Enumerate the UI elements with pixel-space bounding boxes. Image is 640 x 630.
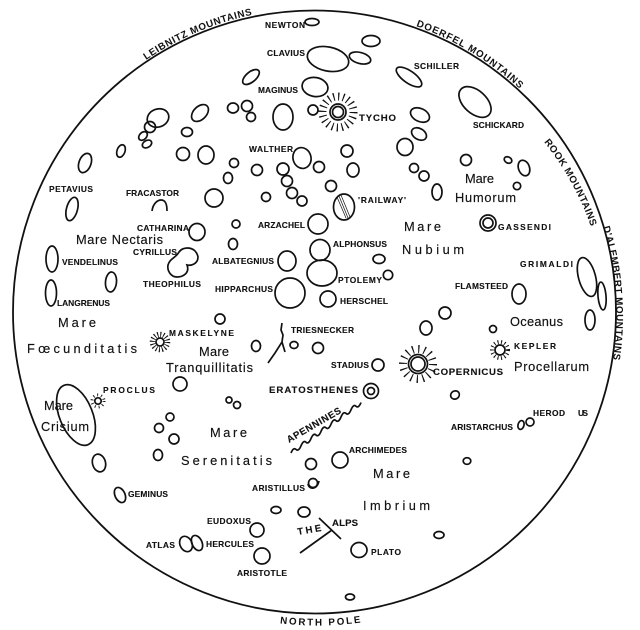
crater: Vendelinus: VENDELINUS: [62, 257, 118, 267]
crater: Herodotus: HEROD: [533, 408, 565, 418]
crater: Proclus: [92, 385, 155, 407]
crater: Gassendi: GASSENDI: [498, 222, 551, 232]
crater: Clavius: [267, 43, 351, 75]
crater: Aristotle: ARISTOTLE: [237, 568, 287, 578]
crater: Gassendi: [480, 215, 551, 232]
crater: Hercules: HERCULES: [206, 539, 254, 549]
crater: Eudoxus: [207, 516, 264, 537]
crater: Geminus: GEMINUS: [128, 489, 168, 499]
Mare Nubium: Mare: [404, 219, 441, 234]
crater: Fracastor: [126, 188, 179, 211]
crater: Albategnius: [212, 251, 296, 271]
crater: Schickard: SCHICKARD: [473, 120, 524, 130]
crater: Geminus: [112, 486, 168, 504]
crater: Catharina: CATHARINA: [137, 223, 189, 233]
crater: Cyrillus and Theophilus: CYRILLUS: [133, 247, 177, 257]
crater: Langrenus: [46, 280, 110, 308]
crater: Proclus: PROCLUS: [103, 385, 155, 395]
Mare Humorum: Humorum: [455, 190, 516, 205]
crater: Kepler: [492, 341, 556, 358]
crater: Atlas: [146, 534, 195, 554]
crater: Fracastor: FRACASTOR: [126, 188, 179, 198]
crater: Vendelinus: [46, 246, 118, 272]
crater: Flamsteed: FLAMSTEED: [455, 281, 508, 291]
label: Petavius: [49, 184, 93, 222]
crater: Stadius: [331, 359, 384, 371]
Mare Serenitatis: Mare: [210, 425, 247, 440]
Mare Foecunditatis: Fœcunditatis: [27, 341, 137, 356]
crater: Flamsteed: [455, 281, 526, 304]
crater: Ptolemy: [307, 260, 382, 286]
crater: Aristillus: ARISTILLUS: [252, 483, 305, 493]
crater: Catharina: [137, 223, 205, 240]
crater: Alphonsus: [310, 239, 387, 260]
Mare Serenitatis: Serenitatis: [181, 453, 272, 468]
crater: Herodotus: [526, 408, 588, 426]
crater: Albategnius: ALBATEGNIUS: [212, 256, 274, 266]
crater: Aristarchus: [451, 420, 525, 432]
Mare Nectaris: Mare Nectaris: [76, 232, 163, 247]
crater: Newton: [265, 18, 319, 30]
crater: Hipparchus: [215, 278, 305, 308]
crater: Railway: [334, 194, 406, 220]
crater: Grimaldi: [520, 255, 600, 299]
crater: Eratosthenes: ERATOSTHENES: [269, 385, 359, 396]
crater: Railway: 'RAILWAY': [358, 195, 406, 205]
Mare Tranquillitatis: [166, 344, 253, 375]
crater: Maskelyne: MASKELYNE: [169, 328, 234, 338]
crater: Alphonsus: ALPHONSUS: [333, 239, 387, 249]
crater: Grimaldi: GRIMALDI: [520, 259, 573, 269]
crater: Copernicus: COPERNICUS: [433, 367, 504, 378]
Mare Imbrium: [363, 466, 430, 513]
Mare Nubium: Nubium: [402, 242, 464, 257]
rille: Triesnecker: TRIESNECKER: [291, 325, 354, 335]
crater: Newton: NEWTON: [265, 20, 305, 30]
mountains: The Alps: ALPS: [332, 518, 359, 529]
crater: Langrenus: LANGRENUS: [57, 298, 110, 308]
mountains: The Alps: THE: [297, 523, 323, 538]
Mare Tranquillitatis: Mare: [199, 344, 229, 359]
Mare Tranquillitatis: Tranquillitatis: [166, 360, 253, 375]
crater: Aristotle: [237, 548, 287, 578]
crater: Plato: PLATO: [371, 547, 401, 557]
label: North Pole: NORTH POLE: [280, 616, 360, 626]
crater: Tycho: TYCHO: [359, 113, 397, 124]
unnamed craters: [76, 36, 607, 600]
crater: Archimedes: ARCHIMEDES: [349, 445, 407, 455]
crater: Archimedes: [332, 445, 407, 468]
crater: Maginus: MAGINUS: [258, 85, 298, 95]
crater: Plato: [351, 542, 401, 558]
Mare Humorum: [455, 171, 516, 205]
crater: Herschel: HERSCHEL: [340, 296, 388, 306]
mountains: Apennines: APENNINES: [285, 405, 344, 446]
crater: Hercules: [189, 534, 254, 552]
label: Leibnitz Mountains: LEIBNITZ MOUNTAINS: [142, 8, 252, 60]
Oceanus Procellarum: Oceanus: [510, 314, 563, 329]
Mare Serenitatis: [181, 425, 272, 468]
crater: Eudoxus: EUDOXUS: [207, 516, 251, 526]
rille: Triesnecker: [268, 323, 354, 363]
Mare Foecunditatis: [27, 315, 137, 356]
label: Petavius: PETAVIUS: [49, 184, 93, 194]
crater: Schickard: [453, 81, 524, 130]
crater: Cyrillus and Theophilus: [133, 247, 201, 289]
crater: Hipparchus: HIPPARCHUS: [215, 284, 273, 294]
Mare Foecunditatis: Mare: [58, 315, 96, 330]
Mare Imbrium: Mare: [373, 466, 410, 481]
crater: Schiller: [393, 61, 459, 91]
crater: Ptolemy: PTOLEMY: [338, 275, 382, 285]
crater: Arzachel: ARZACHEL: [258, 220, 305, 230]
Mare Crisium: Crisium: [41, 419, 89, 434]
crater: Copernicus: [403, 349, 504, 379]
crater: Kepler: KEPLER: [514, 341, 556, 351]
label: Rook Mountains: ROOK MOUNTAINS: [544, 138, 596, 226]
crater: Cyrillus and Theophilus: THEOPHILUS: [143, 279, 201, 289]
label: Doerfel Mountains: DOERFEL MOUNTAINS: [416, 20, 524, 88]
crater: Aristarchus: ARISTARCHUS: [451, 422, 513, 432]
crater: Clavius: CLAVIUS: [267, 48, 305, 58]
crater: Maskelyne: [152, 328, 234, 350]
crater: Walther: WALTHER: [249, 144, 293, 154]
crater: Arzachel: [258, 214, 328, 234]
mountains: The Alps: [297, 518, 359, 553]
crater: Stadius: STADIUS: [331, 360, 369, 370]
crater: Atlas: ATLAS: [146, 540, 175, 550]
Oceanus Procellarum: Procellarum: [514, 359, 589, 374]
crater: Tycho: [322, 96, 397, 128]
Mare Imbrium: Imbrium: [363, 498, 430, 513]
Mare Crisium: Mare: [44, 398, 73, 413]
mountains: Apennines: [285, 403, 361, 453]
Mare Nubium: [402, 219, 464, 257]
crater: Aristillus: [252, 478, 319, 493]
label: D'Alembert Mountains: D'ALEMBERT MOUNTAINS: [603, 226, 624, 360]
crater: Herodotus: US: [578, 408, 588, 418]
Oceanus Procellarum: [510, 314, 589, 374]
crater: Herschel: [320, 291, 388, 307]
crater: Maginus: [258, 75, 329, 99]
crater: Walther: [249, 144, 313, 170]
crater: Schiller: SCHILLER: [414, 61, 459, 71]
crater: Eratosthenes: [269, 384, 378, 398]
Mare Humorum: Mare: [465, 171, 494, 186]
Mare Crisium: [41, 379, 103, 451]
